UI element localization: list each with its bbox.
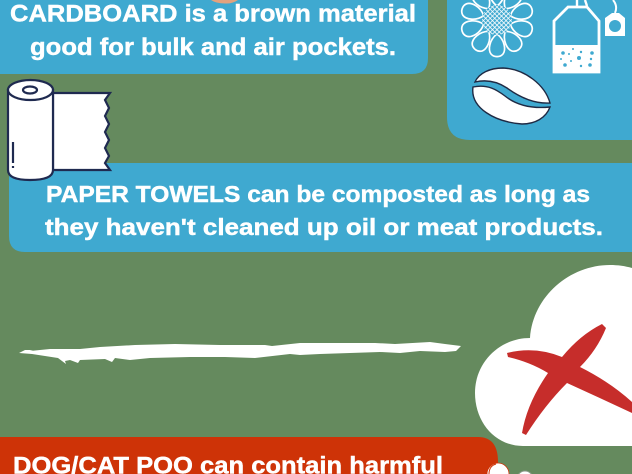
text: cardboard: good for bulk and air pockets.	[30, 34, 396, 61]
panel: cardboard	[0, 0, 428, 74]
panel: paper towels	[9, 163, 632, 252]
icon: red cross	[507, 324, 632, 435]
icon: tea bag	[553, 0, 625, 73]
panel: compostable icons	[447, 0, 632, 140]
brush stroke	[19, 342, 461, 364]
text: paper towels	[45, 181, 603, 240]
icon: cut-off orange shape	[211, 0, 238, 4]
icon: cloud with red cross	[475, 265, 632, 446]
text: cardboard: CARDBOARD is a brown material	[10, 0, 416, 28]
icon: coffee bean	[473, 68, 550, 124]
text: paper towels: PAPER TOWELS can be composted as long as	[46, 181, 590, 207]
icon: bubbles	[487, 463, 533, 474]
text: cardboard	[10, 0, 416, 61]
icon: daisy flower	[460, 0, 534, 57]
text: paper towels: they haven't cleaned up oil or meat products.	[45, 214, 603, 240]
panel: dog and cat poo	[0, 437, 498, 474]
icon: paper towel roll	[8, 80, 110, 180]
